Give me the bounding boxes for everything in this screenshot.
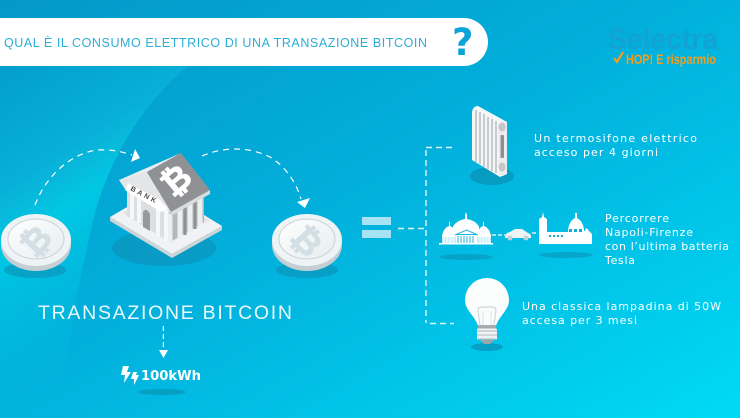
text: radiator: acceso per 4 giorni <box>534 146 658 159</box>
icon: bank <box>110 153 222 266</box>
dashed connector <box>398 148 455 324</box>
text: light bulb: Una classica lampadina di 50W <box>522 300 721 313</box>
logo: Selectra: HOP! E risparmio <box>626 51 716 67</box>
coin: left <box>1 214 71 278</box>
icon: bank: BANK <box>129 186 157 205</box>
arrow: bank to coin <box>202 149 310 208</box>
text: light bulb: accesa per 3 mesi <box>522 314 637 327</box>
title banner <box>0 18 488 66</box>
icon: lightning <box>121 366 139 385</box>
shadow under value <box>138 389 186 395</box>
icon: light bulb <box>465 278 509 351</box>
icon: Naples building <box>439 212 493 260</box>
text: journey: con l’ultima batteria <box>605 240 729 253</box>
icon: Florence skyline <box>539 212 593 258</box>
title banner: QUAL È IL CONSUMO ELETTRICO DI UNA TRANSAZIONE BITCOIN <box>4 35 427 50</box>
arrow: down to value <box>159 326 168 358</box>
value: 100kWh: 100kWh <box>141 369 201 384</box>
heading: transazione bitcoin: TRANSAZIONE BITCOIN <box>38 302 292 324</box>
coin: right: ₿ <box>283 219 330 265</box>
text: journey: Napoli-Firenze <box>605 226 693 239</box>
logo: Selectra: Selectra <box>608 23 718 56</box>
equals sign <box>362 217 391 238</box>
icon: car <box>492 229 537 240</box>
text: journey: Percorrere <box>605 212 669 225</box>
text: journey: Tesla <box>604 254 635 267</box>
coin: right <box>272 214 342 278</box>
coin: left: ₿ <box>13 219 60 265</box>
icon: question mark: ? <box>452 21 473 64</box>
text: radiator: Un termosifone elettrico <box>534 132 697 145</box>
value: 100kWh <box>121 366 201 385</box>
icon: radiator <box>470 106 514 185</box>
arrow: coin to bank <box>35 149 140 205</box>
icon: bank: ₿ <box>154 157 199 204</box>
